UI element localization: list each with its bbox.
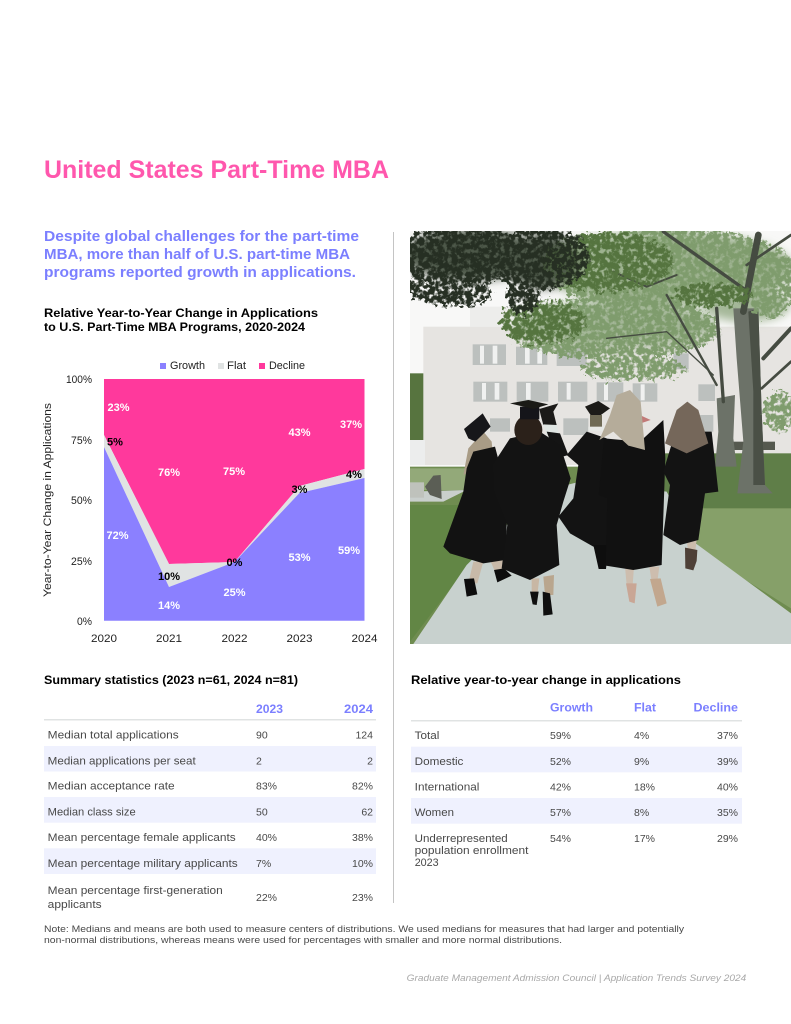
row: total: 59%	[550, 730, 571, 742]
graduate 2	[493, 400, 571, 616]
row: median applications per seat	[44, 746, 376, 772]
row: total: 37%	[717, 730, 738, 742]
row: median acceptance rate: 83%	[256, 780, 277, 792]
row: women	[411, 798, 742, 824]
row: mean percentage first-generation applicants	[48, 885, 373, 911]
table header: 2024	[344, 704, 374, 716]
data labels: 43%	[288, 427, 311, 439]
row: total	[415, 730, 738, 742]
row: international	[415, 782, 738, 794]
row: underrepresented population enrollment 2023: population enrollment	[415, 845, 528, 857]
walkway	[413, 482, 791, 644]
table header	[44, 704, 376, 720]
graduate 3: background figure	[539, 403, 568, 458]
row: total: 4%	[634, 730, 649, 742]
subheading: programs reported growth in applications.	[44, 264, 356, 281]
row: mean percentage military applicants	[44, 848, 376, 874]
data labels: 53%	[288, 552, 311, 564]
x axis labels: 2023	[286, 633, 312, 645]
row: domestic: 39%	[717, 756, 738, 768]
graduate 4	[558, 401, 613, 569]
row: median acceptance rate	[48, 780, 373, 792]
column divider	[392, 232, 394, 903]
row: mean percentage military applicants: 10%	[352, 858, 373, 870]
row: mean percentage female applicants	[48, 832, 373, 844]
row: domestic: Domestic	[415, 756, 464, 768]
y axis labels	[66, 374, 92, 628]
table header: Growth	[550, 702, 593, 714]
row: international: 18%	[634, 782, 655, 794]
data labels: 23%	[107, 402, 130, 414]
row: total: Total	[415, 730, 439, 742]
row: median class size: 50	[256, 806, 268, 818]
y axis labels: 100%	[66, 374, 92, 386]
row: underrepresented population enrollment 2023: 29%	[717, 833, 738, 845]
subheading: Despite global challenges for the part-time	[44, 228, 359, 245]
row: underrepresented population enrollment 2023: 54%	[550, 833, 571, 845]
area: decline	[104, 379, 364, 564]
row: women: 8%	[634, 807, 649, 819]
row: mean percentage female applicants: 38%	[352, 832, 373, 844]
building	[423, 307, 791, 465]
row: mean percentage female applicants: Mean percentage female applicants	[48, 832, 236, 844]
graduate 6	[663, 402, 718, 570]
data labels: 10%	[158, 571, 180, 583]
row: mean percentage first-generation applicants: applicants	[48, 899, 102, 911]
relative change heading: Relative year-to-year change in applications	[411, 673, 681, 687]
row: median applications per seat: Median applications per seat	[48, 756, 196, 768]
legend	[160, 360, 305, 372]
row: median applications per seat: 2	[256, 756, 262, 768]
row: women: 35%	[717, 807, 738, 819]
side path	[410, 490, 467, 502]
title: United States Part-Time MBA	[44, 156, 389, 184]
area: growth	[104, 447, 364, 621]
row: mean percentage first-generation applicants: 22%	[256, 892, 277, 904]
row: median class size: Median class size	[48, 806, 136, 818]
foliage: blurred underlay	[403, 230, 791, 348]
subheading	[44, 228, 359, 281]
methodology note	[44, 924, 684, 946]
row: mean percentage military applicants: Mean percentage military applicants	[48, 858, 238, 870]
x axis labels: 2020	[91, 633, 117, 645]
chart title	[44, 308, 318, 334]
row: domestic	[411, 747, 742, 772]
data labels: 4%	[346, 469, 362, 481]
data labels: 75%	[223, 466, 245, 478]
area: flat	[104, 435, 364, 587]
row: mean percentage military applicants: 7%	[256, 858, 271, 870]
data labels: 14%	[158, 600, 180, 612]
row: median total applications	[48, 730, 373, 742]
summary statistics heading: Summary statistics (2023 n=61, 2024 n=81)	[44, 673, 298, 687]
table header	[411, 702, 742, 722]
x axis labels: 2024	[352, 633, 378, 645]
row: median acceptance rate: Median acceptance rate	[48, 780, 175, 792]
data labels: 5%	[107, 436, 123, 448]
x axis labels: 2022	[222, 633, 248, 645]
lawns	[410, 453, 791, 644]
foliage: light canopy	[507, 227, 791, 432]
legend: Flat	[227, 360, 246, 372]
y axis labels: 0%	[77, 616, 92, 628]
row: domestic: 9%	[634, 756, 649, 768]
subheading: MBA, more than half of U.S. part-time MBA	[44, 246, 350, 263]
row: median total applications: 90	[256, 730, 268, 742]
tree branches	[607, 232, 791, 402]
photo: graduates walking on campus	[397, 223, 791, 644]
data labels: 59%	[338, 545, 360, 557]
table header: Flat	[634, 702, 656, 714]
row: mean percentage female applicants: 40%	[256, 832, 277, 844]
legend: Growth	[170, 360, 205, 372]
data labels: 3%	[292, 484, 308, 496]
row: international: 40%	[717, 782, 738, 794]
y axis labels: 50%	[71, 495, 92, 507]
graduate 1	[443, 413, 512, 597]
row: median class size: 62	[361, 806, 373, 818]
data labels: 76%	[158, 467, 180, 479]
data labels: 0%	[227, 557, 243, 569]
foliage: mid canopy	[500, 232, 753, 343]
data labels	[106, 402, 362, 612]
row: median class size	[44, 797, 376, 823]
table header: Decline	[694, 702, 738, 714]
methodology note: Note: Medians and means are both used to measure centers of distributions. We used medians for measures that had larger and potentially	[44, 924, 684, 935]
row: median applications per seat: 2	[367, 756, 373, 768]
data labels: 25%	[223, 587, 246, 599]
tree trunks	[715, 308, 773, 493]
y axis title: Year-to-Year Change in Applications	[42, 402, 54, 597]
methodology note: non-normal distributions, whereas means were used for percentages with smaller and more normal distributions.	[44, 935, 562, 946]
stacked area chart	[42, 360, 378, 645]
row: mean percentage first-generation applicants: Mean percentage first-generation	[48, 885, 223, 897]
y axis labels: 75%	[71, 435, 92, 447]
chart title: to U.S. Part-Time MBA Programs, 2020-2024	[44, 322, 306, 334]
y axis labels: 25%	[71, 556, 92, 568]
sky	[410, 231, 791, 644]
row: underrepresented population enrollment 2023: 2023	[415, 857, 439, 869]
x axis labels: 2021	[156, 633, 182, 645]
row: median total applications: 124	[355, 730, 373, 742]
row: women: 57%	[550, 807, 571, 819]
row: underrepresented population enrollment 2023	[415, 833, 738, 869]
relative change table	[411, 702, 742, 869]
foliage: dark canopy	[397, 223, 590, 315]
row: international: 42%	[550, 782, 571, 794]
chart title: Relative Year-to-Year Change in Applications	[44, 308, 318, 320]
row: domestic: 52%	[550, 756, 571, 768]
bench table	[410, 482, 424, 498]
row: median total applications: Median total applications	[48, 730, 179, 742]
data labels: 72%	[106, 530, 129, 542]
left hedge	[410, 373, 423, 442]
chair	[425, 475, 442, 499]
data labels: 37%	[340, 419, 362, 431]
summary statistics table	[44, 704, 376, 911]
row: mean percentage first-generation applicants: 23%	[352, 892, 373, 904]
x axis labels	[91, 633, 378, 645]
row: women: Women	[415, 807, 454, 819]
table header: 2023	[256, 704, 283, 716]
footer source line: Graduate Management Admission Council | Application Trends Survey 2024	[407, 973, 746, 984]
row: international: International	[415, 782, 479, 794]
row: underrepresented population enrollment 2023: Underrepresented	[415, 833, 508, 845]
row: underrepresented population enrollment 2023: 17%	[634, 833, 655, 845]
row: median acceptance rate: 82%	[352, 780, 373, 792]
left white wall	[410, 440, 425, 465]
graduate 5: blond hair	[599, 390, 667, 607]
legend: Decline	[269, 360, 305, 372]
